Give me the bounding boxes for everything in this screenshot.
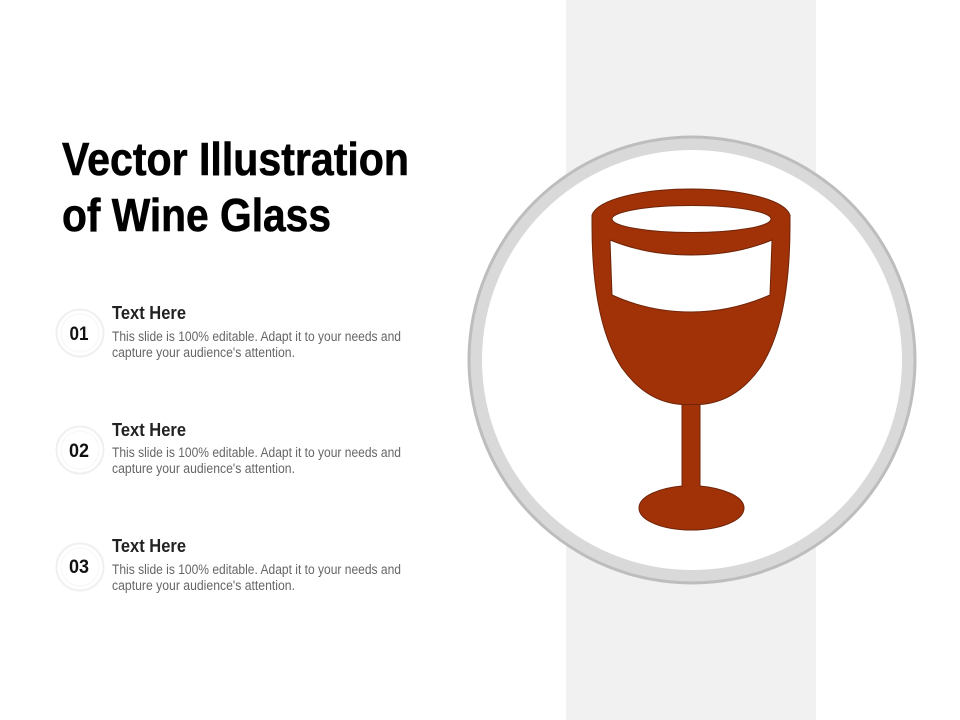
description 03: capture your audience's attention. <box>112 578 295 593</box>
number badge 01: 01 <box>70 324 89 345</box>
description 03 <box>112 562 401 593</box>
heading 01: Text Here <box>112 303 186 323</box>
icon: wine glass <box>592 189 790 530</box>
description 01: This slide is 100% editable. Adapt it to your needs and <box>112 329 401 344</box>
number badge 02: 02 <box>69 441 89 462</box>
heading 03: Text Here <box>112 536 186 556</box>
description 02 <box>112 445 401 476</box>
description 03: This slide is 100% editable. Adapt it to your needs and <box>112 562 401 577</box>
description 01: capture your audience's attention. <box>112 345 295 360</box>
title: Vector Illustration <box>62 133 409 185</box>
description 02: This slide is 100% editable. Adapt it to your needs and <box>112 445 401 460</box>
title: of Wine Glass <box>62 189 331 241</box>
number badge 02 <box>56 426 104 474</box>
number badge 03: 03 <box>69 557 89 578</box>
glass bowl with rim <box>592 189 790 404</box>
background vertical band <box>566 0 816 720</box>
item 02 <box>56 420 401 476</box>
item 01 <box>56 303 401 360</box>
large circle frame <box>468 136 916 584</box>
number badge 01 <box>56 310 104 356</box>
description 02: capture your audience's attention. <box>112 461 295 476</box>
description 01 <box>112 329 401 360</box>
number badge 03 <box>56 544 104 590</box>
title <box>62 133 409 241</box>
heading 02: Text Here <box>112 420 186 440</box>
glass stem and base <box>639 400 744 530</box>
item 03 <box>56 536 401 593</box>
